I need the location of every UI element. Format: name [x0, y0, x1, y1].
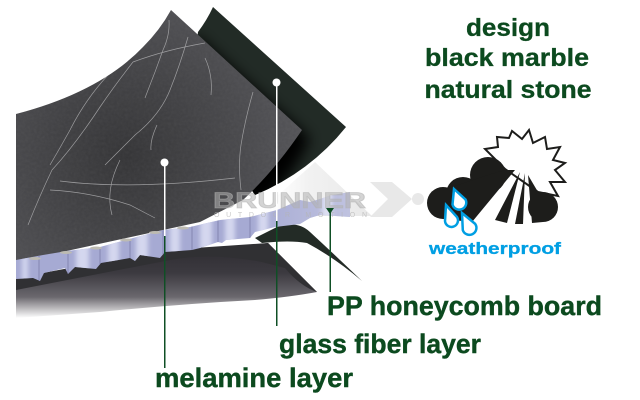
label: glass fiber layer: glass fiber layer: [279, 329, 481, 359]
melamine layer sheet: [16, 8, 306, 268]
heading: design black marble natural stone: black marble: [425, 44, 589, 72]
icon: storm cloud: [427, 157, 558, 224]
marker: PP honeycomb board: [326, 208, 334, 292]
honeycomb cell highlights: [20, 196, 334, 279]
icon: weatherproof: [427, 130, 565, 258]
panel: material layers illustration: [16, 7, 372, 318]
PP honeycomb board: [16, 192, 350, 281]
heading: design black marble natural stone: [424, 14, 592, 104]
honeycomb cell tops: [29, 226, 189, 260]
watermark logo: [213, 182, 424, 219]
watermark wash: [255, 162, 372, 216]
watermark logo: OUTDOOR MOTION: [214, 212, 367, 219]
label: weatherproof: weatherproof: [428, 239, 561, 258]
honeycomb cell walls: [38, 217, 250, 281]
marker: melamine layer: [160, 158, 168, 368]
label: PP honeycomb board: PP honeycomb board: [327, 291, 602, 321]
watermark logo: BRUNNER: [213, 188, 366, 213]
marble veins: [28, 20, 253, 225]
glass fiber layer: [190, 7, 346, 195]
glass fiber underside tail: [255, 224, 362, 281]
icon: rain drops: [445, 189, 476, 235]
heading: design black marble natural stone: design: [466, 14, 550, 42]
glass fiber shadow: [198, 32, 312, 195]
floor shadow: [16, 243, 317, 318]
icon: sun burst: [485, 130, 565, 196]
heading: design black marble natural stone: natural stone: [424, 76, 592, 104]
melamine underside: [16, 243, 317, 292]
label: melamine layer: melamine layer: [155, 363, 353, 393]
marker: glass fiber layer: [272, 78, 280, 326]
